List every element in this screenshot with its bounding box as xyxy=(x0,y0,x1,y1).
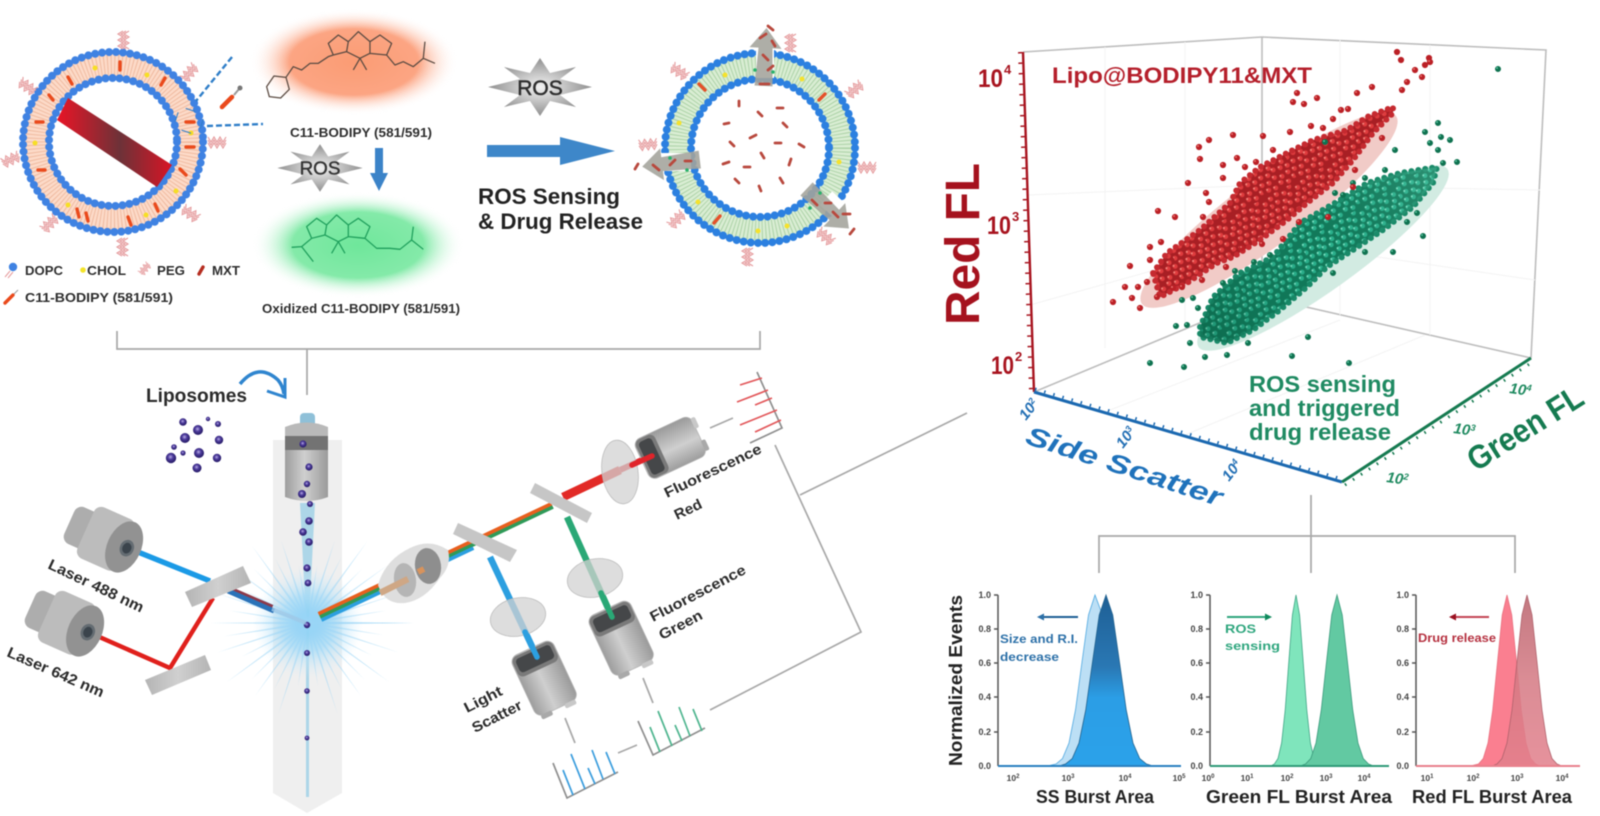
legend: CHOL: CHOL xyxy=(87,264,126,278)
x tick labels: 2 xyxy=(1290,774,1294,780)
icon: laser 642 xyxy=(19,581,112,663)
x tick labels: 10 xyxy=(1202,773,1211,783)
label: fluorescence red xyxy=(662,442,764,524)
tick labels blue xyxy=(1016,396,1246,484)
collection lenses xyxy=(487,438,642,641)
tick labels green xyxy=(1385,380,1532,489)
tick labels: 0.2 xyxy=(978,727,991,737)
signal trace: light scatter xyxy=(553,750,618,798)
tick labels: 1.0 xyxy=(1190,590,1203,600)
legend: DOPC xyxy=(5,263,63,278)
axis: Red FL xyxy=(937,52,1034,392)
tick labels red: 4 xyxy=(1004,62,1012,77)
icon: ROS burst large: ROS xyxy=(517,77,563,100)
annotation xyxy=(1225,614,1280,653)
label: ROS sensing and triggered drug release: and triggered xyxy=(1249,395,1400,421)
oxidized bilayer xyxy=(665,53,855,243)
x tick labels: 10 xyxy=(1421,773,1430,783)
arrow: curved sample feed xyxy=(240,372,285,397)
plot walls xyxy=(1023,37,1546,435)
mirror top xyxy=(185,566,251,607)
x tick labels xyxy=(1007,773,1186,783)
tick labels green: 4 xyxy=(1525,382,1532,393)
legend: DOPC: DOPC xyxy=(25,264,63,278)
icon: ROS burst small: ROS xyxy=(300,158,340,179)
tick labels: 0.2 xyxy=(1190,727,1203,737)
chart: SS burst area xyxy=(978,590,1186,807)
x tick labels: 10 xyxy=(1062,773,1071,783)
green glow xyxy=(252,192,464,298)
tick labels: 0.6 xyxy=(1190,658,1203,668)
sample nozzle xyxy=(285,413,328,501)
zoom callout dashed lines xyxy=(173,57,263,135)
arrow: to release state xyxy=(487,137,615,165)
x tick labels: 3 xyxy=(1329,774,1333,780)
histogram curves xyxy=(1470,595,1540,766)
tick labels: 0.4 xyxy=(978,692,991,702)
top bracket xyxy=(117,331,760,395)
y axis title: Normalized Events: Normalized Events xyxy=(946,595,966,766)
label: laser 488: Laser 488 nm xyxy=(45,556,146,616)
beam: blue laser xyxy=(128,548,306,623)
annotation: ROS xyxy=(1225,622,1256,636)
icon: light scatter detector xyxy=(509,639,581,721)
label: fluorescence red: Fluorescence xyxy=(662,442,764,502)
flow cell xyxy=(273,440,342,813)
membrane pores xyxy=(655,42,856,226)
liposome bilayer xyxy=(23,52,203,232)
label: light scatter xyxy=(462,684,525,737)
axes xyxy=(994,595,998,766)
legend xyxy=(5,261,240,305)
annotation: Drug release xyxy=(1418,633,1496,645)
detector connectors xyxy=(565,418,733,753)
tick labels blue: 3 xyxy=(1123,424,1134,434)
PEG chains xyxy=(0,31,226,256)
x tick labels xyxy=(1202,773,1371,783)
mirror bottom xyxy=(145,655,211,695)
objective lens xyxy=(378,543,449,603)
signal trace: red xyxy=(737,372,782,443)
tick labels: 0.8 xyxy=(1396,624,1409,634)
tick labels blue: 10 xyxy=(1016,400,1039,423)
x tick labels: 1 xyxy=(1430,774,1434,780)
label: fluorescence green: Green xyxy=(656,608,706,644)
escape arrows xyxy=(640,27,860,240)
histogram curves xyxy=(1271,595,1321,766)
x tick labels: 10 xyxy=(1320,773,1329,783)
x tick labels: 10 xyxy=(1007,773,1016,783)
x tick labels: 3 xyxy=(1071,774,1075,780)
x tick labels: 10 xyxy=(1241,773,1250,783)
tick labels red xyxy=(978,62,1022,380)
x tick labels: 10 xyxy=(1281,773,1290,783)
axis title red: Red FL xyxy=(937,163,990,325)
beams collected xyxy=(318,455,653,657)
dichroic mirrors xyxy=(453,483,592,562)
x tick labels: 2 xyxy=(1476,774,1480,780)
label: laser 642: Laser 642 nm xyxy=(4,644,107,701)
tick labels: 1.0 xyxy=(1396,590,1409,600)
tick labels red: 10 xyxy=(991,352,1014,380)
green dense cloud xyxy=(1200,167,1437,343)
red dense cloud xyxy=(1153,107,1393,297)
red drug crystal bar xyxy=(57,98,172,187)
orange glow xyxy=(250,9,458,115)
icon: ROS burst large xyxy=(488,58,592,116)
histogram curves xyxy=(1047,595,1148,766)
red outlier points xyxy=(1112,52,1430,308)
liposome particles xyxy=(166,417,223,472)
chart: green FL burst area xyxy=(1190,590,1393,807)
x tick labels: 10 xyxy=(1511,773,1520,783)
starburst xyxy=(210,540,414,714)
membrane cargo xyxy=(670,70,839,231)
panel: flow cytometer sample column xyxy=(210,413,414,813)
annotation: sensing xyxy=(1225,639,1280,653)
axis title blue: Side Scatter xyxy=(1022,420,1229,513)
legend: MXT: MXT xyxy=(212,264,240,278)
x tick labels: 2 xyxy=(1016,774,1020,780)
heading: ROS sensing and drug release: ROS Sensing xyxy=(478,184,620,209)
tick labels xyxy=(1190,590,1203,771)
panel: intact liposome xyxy=(0,31,263,256)
legend: MXT xyxy=(199,264,240,278)
legend: PEG: PEG xyxy=(157,264,185,278)
tick labels blue: 10 xyxy=(1113,428,1136,451)
purple particles in stream xyxy=(298,440,313,740)
arrow: oxidation xyxy=(370,148,388,191)
x tick labels: 0 xyxy=(1211,774,1215,780)
axis title: SS Burst Area xyxy=(1036,787,1155,807)
blue detector beam tip xyxy=(525,632,537,657)
connector bracket xyxy=(710,413,967,710)
tick labels red: 3 xyxy=(1012,209,1019,224)
panel: 3D scatter plot xyxy=(937,37,1590,513)
axis: Green FL xyxy=(1342,358,1590,489)
x tick labels: 1 xyxy=(1250,774,1254,780)
legend: C11-BODIPY: C11-BODIPY (581/591) xyxy=(25,291,173,305)
annotation: decrease xyxy=(1000,652,1059,664)
x tick labels: 10 xyxy=(1173,773,1182,783)
axis title: Green FL Burst Area xyxy=(1206,787,1393,807)
x tick labels: 4 xyxy=(1367,774,1371,780)
annotation xyxy=(1000,614,1078,664)
x tick labels: 10 xyxy=(1556,773,1565,783)
annotation xyxy=(1418,614,1496,645)
x tick labels: 3 xyxy=(1520,774,1524,780)
tick labels blue: 10 xyxy=(1219,461,1242,484)
tick labels: 1.0 xyxy=(978,590,991,600)
PEG chains xyxy=(639,34,876,266)
icon: green detector xyxy=(586,599,658,681)
panel: oxidized liposome releasing drug xyxy=(635,26,876,266)
panel: detection optics xyxy=(318,372,782,798)
tick labels xyxy=(978,590,991,771)
red detector beam tip xyxy=(632,456,652,465)
label: oxidized C11-BODIPY: Oxidized C11-BODIPY (581/591) xyxy=(262,302,460,316)
tick labels: 0.0 xyxy=(1396,761,1409,771)
x tick labels: 10 xyxy=(1119,773,1128,783)
label: ROS sensing and triggered drug release: drug release xyxy=(1249,419,1391,445)
signal trace: green xyxy=(638,707,705,755)
sample stream xyxy=(300,503,315,797)
panel: lasers xyxy=(4,497,306,701)
tick labels: 0.0 xyxy=(978,761,991,771)
tick labels: 0.8 xyxy=(978,624,991,634)
panel: C11-BODIPY structure xyxy=(250,9,458,140)
label: ROS sensing and triggered drug release: ROS sensing xyxy=(1249,371,1396,397)
x tick labels: 4 xyxy=(1565,774,1569,780)
tick labels green: 10 xyxy=(1508,380,1527,399)
heading: ROS sensing and drug release xyxy=(478,184,643,234)
tick labels: 0.8 xyxy=(1190,624,1203,634)
label: ROS sensing and triggered drug release xyxy=(1249,371,1400,445)
tick labels green: 10 xyxy=(1452,420,1471,439)
icon: C11-BODIPY molecule xyxy=(222,86,242,107)
x tick labels: 10 xyxy=(1358,773,1367,783)
chart: red FL burst area xyxy=(1396,590,1580,807)
membrane cargo xyxy=(35,62,194,225)
tick labels: 0.2 xyxy=(1396,727,1409,737)
x tick labels: 5 xyxy=(1182,774,1186,780)
label: C11-BODIPY: C11-BODIPY (581/591) xyxy=(290,126,432,140)
beam: red laser xyxy=(88,598,213,668)
tick labels: 0.6 xyxy=(1396,658,1409,668)
x tick labels: 4 xyxy=(1128,774,1132,780)
green outlier points xyxy=(1149,68,1498,367)
green detector beam tip xyxy=(601,593,612,617)
tick labels xyxy=(1396,590,1409,771)
axes xyxy=(1206,595,1210,766)
bottom-right bracket xyxy=(1099,495,1515,573)
tick labels green: 10 xyxy=(1385,469,1404,488)
legend: PEG xyxy=(138,261,185,278)
tick labels blue: 4 xyxy=(1228,457,1240,468)
label: light scatter: Light xyxy=(462,684,506,717)
label: fluorescence red: Red xyxy=(672,497,705,524)
label: fluorescence green xyxy=(647,562,749,644)
tick labels: 0.6 xyxy=(978,658,991,668)
tick labels red: 10 xyxy=(978,65,1003,93)
tick labels red: 2 xyxy=(1015,349,1022,364)
tick labels green: 3 xyxy=(1470,422,1476,433)
axis: Side Scatter xyxy=(1016,389,1342,513)
tick labels green: 2 xyxy=(1402,471,1409,482)
heading: ROS sensing and drug release: & Drug Release xyxy=(478,209,643,234)
label: fluorescence green: Fluorescence xyxy=(647,562,749,626)
chemical structure xyxy=(267,32,435,98)
tick labels: 0.4 xyxy=(1190,692,1203,702)
label: light scatter: Scatter xyxy=(470,698,525,737)
x tick labels: 10 xyxy=(1467,773,1476,783)
oxidized chemical structure xyxy=(292,215,423,262)
icon: red detector xyxy=(633,413,711,481)
label: Lipo@BODIPY11&MXT: Lipo@BODIPY11&MXT xyxy=(1052,63,1313,88)
axis title: Red FL Burst Area xyxy=(1412,787,1573,807)
icon: laser 488 xyxy=(58,497,151,579)
tick labels blue: 2 xyxy=(1025,396,1037,407)
tick labels: 0.0 xyxy=(1190,761,1203,771)
icon: ROS burst small xyxy=(277,144,363,192)
red population halo xyxy=(1122,89,1416,331)
label: Liposomes: Liposomes xyxy=(146,386,247,407)
axis title green: Green FL xyxy=(1460,378,1590,478)
panel: oxidized C11-BODIPY xyxy=(252,192,464,316)
axes xyxy=(1412,595,1416,766)
x tick labels xyxy=(1421,773,1569,783)
tick labels: 0.4 xyxy=(1396,692,1409,702)
tick labels red: 10 xyxy=(987,212,1011,240)
green population halo xyxy=(1180,143,1466,373)
released drug molecules xyxy=(635,26,854,234)
annotation: Size and R.I. xyxy=(1000,634,1078,646)
